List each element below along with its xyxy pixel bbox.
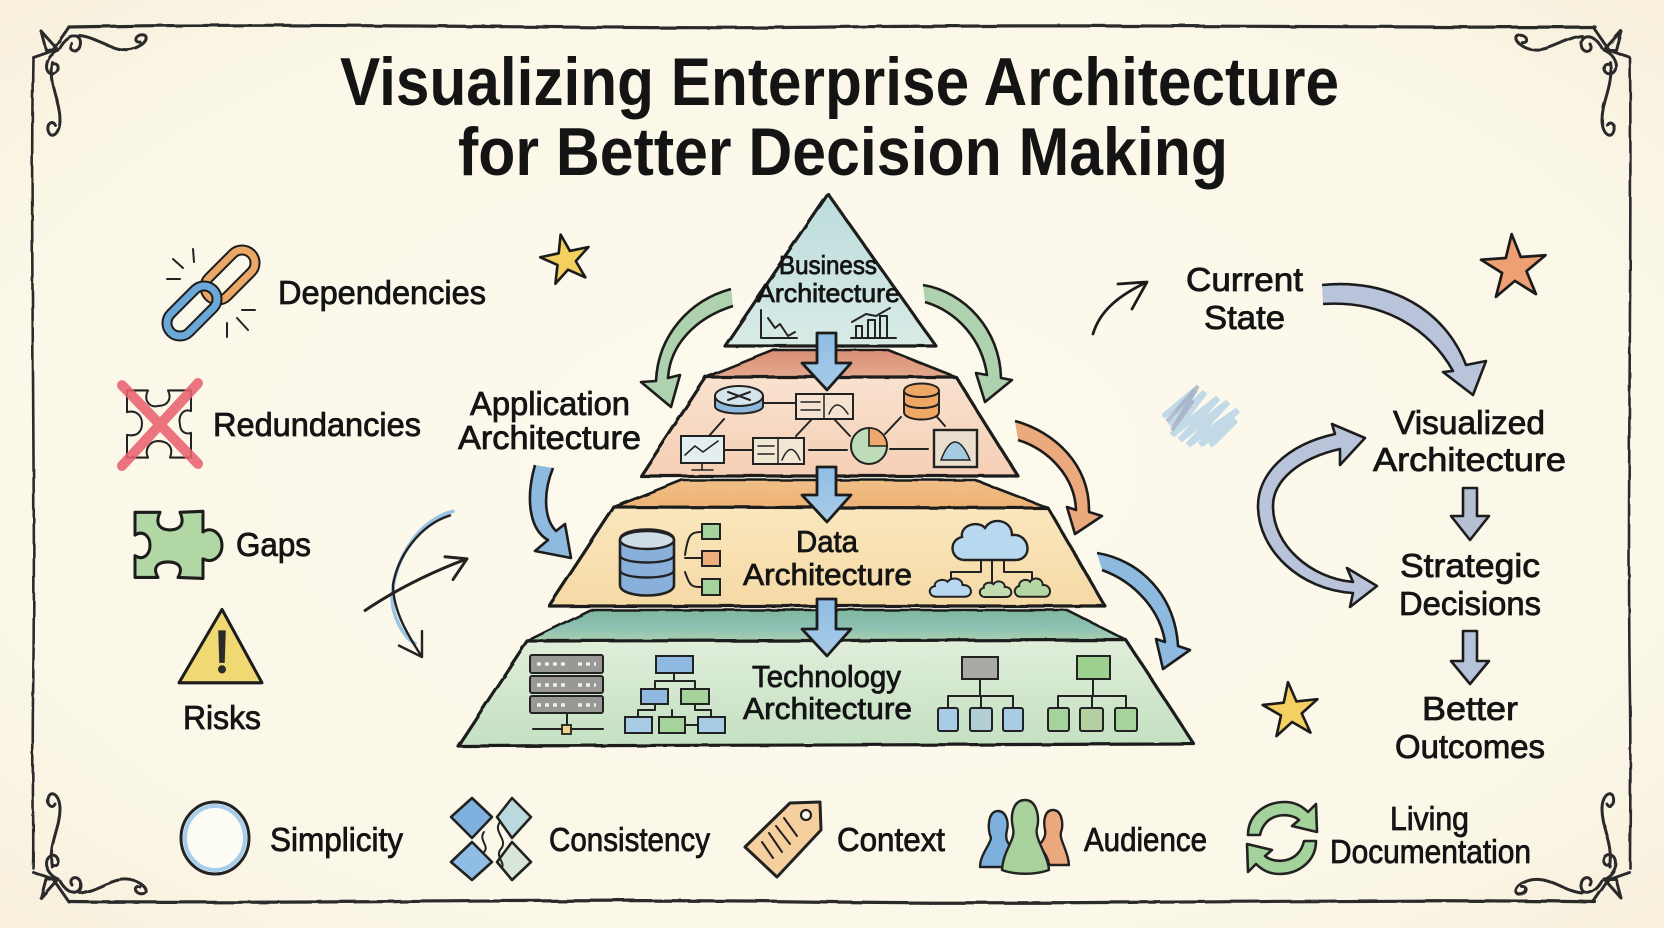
- tier: data top face: [614, 480, 1048, 508]
- label: Redundancies: Redundancies: [213, 406, 421, 443]
- star: orange top right: [1479, 232, 1548, 298]
- icons: business charts: [761, 308, 896, 338]
- decorative scribble: [1165, 386, 1238, 445]
- label: Technology Architecture: Architecture: [743, 691, 912, 726]
- arrow: application to data: [802, 467, 851, 522]
- tier: application front: [641, 377, 1018, 476]
- label: Business Architecture: [757, 250, 900, 308]
- label: Application Architecture: [458, 385, 641, 456]
- star: yellow top left: [536, 229, 595, 286]
- icon: chain link: [162, 245, 260, 341]
- star: yellow bottom right: [1261, 679, 1321, 737]
- label: Context: Context: [837, 821, 945, 858]
- arrow: business to application: [802, 333, 851, 390]
- icons: technology servers: [530, 655, 603, 734]
- label: Living Documentation: Living: [1390, 800, 1469, 837]
- label: Application Architecture: Architecture: [458, 419, 641, 456]
- panel: decision flow: [1186, 261, 1566, 765]
- arrow: visualized to decisions: [1451, 488, 1489, 540]
- arrow: green right curve: [923, 285, 1012, 402]
- icon: interlocking diamonds: [451, 798, 531, 880]
- label: Gaps: Gaps: [236, 526, 311, 563]
- icon: tag: [745, 802, 821, 877]
- label: Technology Architecture: Technology: [752, 659, 901, 694]
- icon: refresh cycle: [1247, 802, 1317, 874]
- label: Better Outcomes: [1395, 690, 1545, 765]
- label: Consistency: Consistency: [549, 821, 710, 858]
- arrow: data to technology: [802, 599, 851, 656]
- label: Visualized Architecture: [1373, 404, 1566, 478]
- label: Simplicity: Simplicity: [270, 821, 403, 858]
- tier: business triangle: [725, 194, 936, 346]
- label: Audience: Audience: [1084, 821, 1207, 858]
- label: Business Architecture: Business: [779, 250, 877, 280]
- label: Strategic Decisions: [1399, 547, 1541, 622]
- label: Application Architecture: Application: [470, 385, 630, 422]
- label: Business Architecture: Architecture: [757, 278, 900, 308]
- label: Technology Architecture: [743, 659, 912, 726]
- label: Data Architecture: Architecture: [743, 557, 912, 592]
- panel: principles row: [181, 798, 1531, 880]
- label: Living Documentation: Documentation: [1330, 833, 1531, 870]
- icon: crossed-out puzzle piece: [122, 383, 198, 466]
- icon: circle: [181, 802, 249, 874]
- label: Living Documentation: [1330, 800, 1531, 870]
- label: Visualized Architecture: Architecture: [1373, 441, 1566, 478]
- title: Visualizing Enterprise Architecture: [340, 44, 1339, 120]
- arrow: decisions to outcomes: [1451, 631, 1489, 684]
- title: [340, 44, 1339, 190]
- arrow: green left curve: [641, 289, 733, 407]
- icons: application systems: [681, 384, 977, 470]
- icons: gray hierarchy: [938, 657, 1023, 731]
- tier: application top face: [706, 350, 956, 377]
- label: Risks: Risks: [183, 699, 261, 736]
- icons: cloud network: [930, 521, 1050, 597]
- icon: tangled arrows: [365, 511, 467, 657]
- label: Strategic Decisions: Decisions: [1399, 585, 1541, 622]
- tier: data front: [549, 507, 1105, 606]
- tier: technology top face: [527, 610, 1126, 641]
- arrow: two-way loop: [1258, 424, 1377, 607]
- arrow: blue right curve: [1097, 553, 1190, 669]
- label: Current State: Current: [1186, 261, 1303, 298]
- arrow: small black pointer: [1093, 282, 1147, 334]
- arrow: blue left curve: [530, 465, 571, 558]
- icon: people: [980, 800, 1069, 874]
- label: Better Outcomes: Outcomes: [1395, 728, 1545, 765]
- icons: data stores: [620, 524, 720, 596]
- label: Current State: [1186, 261, 1303, 336]
- tier: technology front: [458, 640, 1194, 746]
- pyramid: [458, 194, 1194, 746]
- arrow: orange curve: [1015, 421, 1102, 534]
- label: Better Outcomes: Better: [1422, 690, 1518, 727]
- label: Data Architecture: [743, 524, 912, 592]
- icon: warning triangle: [179, 609, 262, 683]
- label: Visualized Architecture: Visualized: [1393, 404, 1545, 441]
- icon: green puzzle piece: [135, 511, 222, 578]
- icons: green hierarchy: [1048, 656, 1137, 731]
- label: Data Architecture: Data: [796, 524, 859, 559]
- label: Current State: State: [1204, 299, 1285, 336]
- label: Dependencies: Dependencies: [278, 274, 486, 311]
- label: Strategic Decisions: Strategic: [1400, 547, 1540, 584]
- title: for Better Decision Making: [458, 114, 1228, 190]
- arrow: current to visualized: [1322, 284, 1486, 395]
- panel: problems list: [122, 245, 486, 736]
- icons: network tree: [625, 656, 725, 733]
